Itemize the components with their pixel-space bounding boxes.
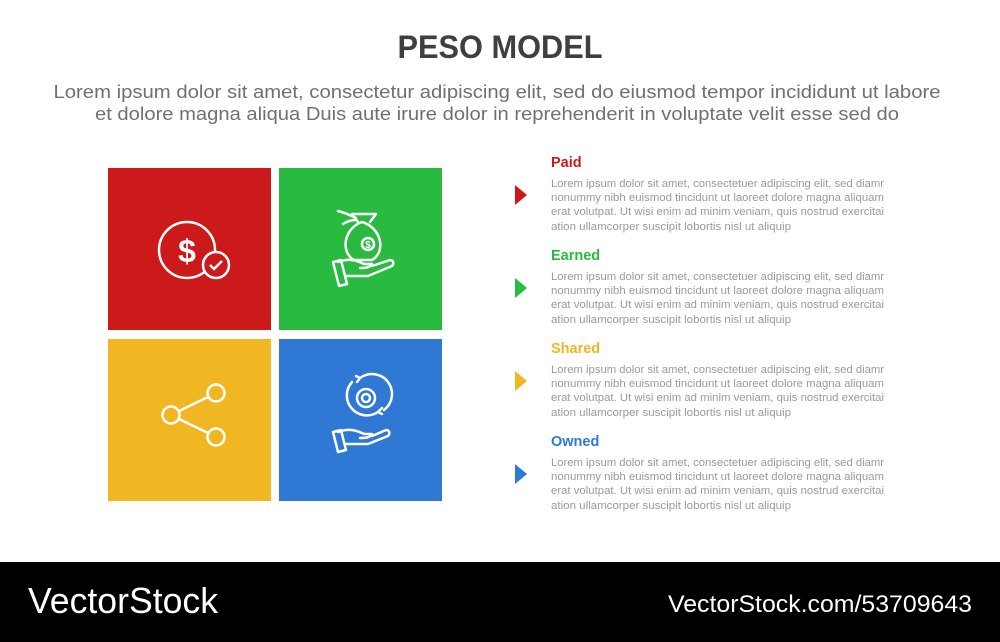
footer bar: VectorStock.com/53709643 [668,591,972,618]
item: owned: Lorem ipsum dolor sit amet, consectetuer adipiscing elit, sed diamr [551,457,884,469]
arrow: shared [515,371,527,391]
subtitle: et dolore magna aliqua Duis aute irure dolor in reprehenderit in voluptate velit esse sed do [95,104,899,124]
panel: owned square [279,339,442,501]
item: owned: erat volutpat. Ut wisi enim ad minim veniam, quis nostrud exercitai [551,485,884,497]
item: paid: nonummy nibh euismod tincidunt ut laoreet dolore magna aliquam [551,192,884,204]
icon: share [162,384,224,446]
panel: paid square [108,168,271,330]
item: owned: Owned [551,434,599,450]
item: earned: Lorem ipsum dolor sit amet, consectetuer adipiscing elit, sed diamr [551,271,884,283]
item: paid [515,155,884,233]
arrow: owned [515,464,527,484]
icon: dollar coin with check [159,222,229,278]
icon: dollar coin with check: $ [178,233,196,269]
panel: shared square [108,339,271,501]
item: paid: erat volutpat. Ut wisi enim ad minim veniam, quis nostrud exercitai [551,206,884,218]
icon: gear in hand with arrows [333,374,392,452]
item: earned: Earned [551,248,600,264]
item: owned [515,434,884,512]
item: owned: ation ullamcorper suscipit lobortis nisl ut aliquip [551,500,791,512]
panel: earned square [279,168,442,330]
title: PESO MODEL [398,29,602,65]
item: shared: Shared [551,341,600,357]
item: shared [515,341,884,419]
item: earned [515,248,884,326]
arrow: earned [515,278,527,298]
item: paid: ation ullamcorper suscipit lobortis nisl ut aliquip [551,221,791,233]
item: earned: nonummy nibh euismod tincidunt ut laoreet dolore magna aliquam [551,285,884,297]
footer bar [0,562,1000,642]
item: earned: erat volutpat. Ut wisi enim ad minim veniam, quis nostrud exercitai [551,299,884,311]
item: shared: nonummy nibh euismod tincidunt ut laoreet dolore magna aliquam [551,378,884,390]
item: shared: ation ullamcorper suscipit lobortis nisl ut aliquip [551,407,791,419]
item: earned: ation ullamcorper suscipit lobortis nisl ut aliquip [551,314,791,326]
subtitle [54,82,940,124]
panel: earned square: $ [365,240,371,251]
item: paid: Paid [551,155,582,171]
footer bar: VectorStock [28,580,219,621]
item: shared: erat volutpat. Ut wisi enim ad minim veniam, quis nostrud exercitai [551,392,884,404]
item: owned: nonummy nibh euismod tincidunt ut laoreet dolore magna aliquam [551,471,884,483]
icon: money bag in hand [333,211,393,286]
item: shared: Lorem ipsum dolor sit amet, consectetuer adipiscing elit, sed diamr [551,364,884,376]
arrow: paid [515,185,527,205]
item: paid: Lorem ipsum dolor sit amet, consectetuer adipiscing elit, sed diamr [551,178,884,190]
subtitle: Lorem ipsum dolor sit amet, consectetur adipiscing elit, sed do eiusmod tempor incididunt ut labore [54,82,940,102]
